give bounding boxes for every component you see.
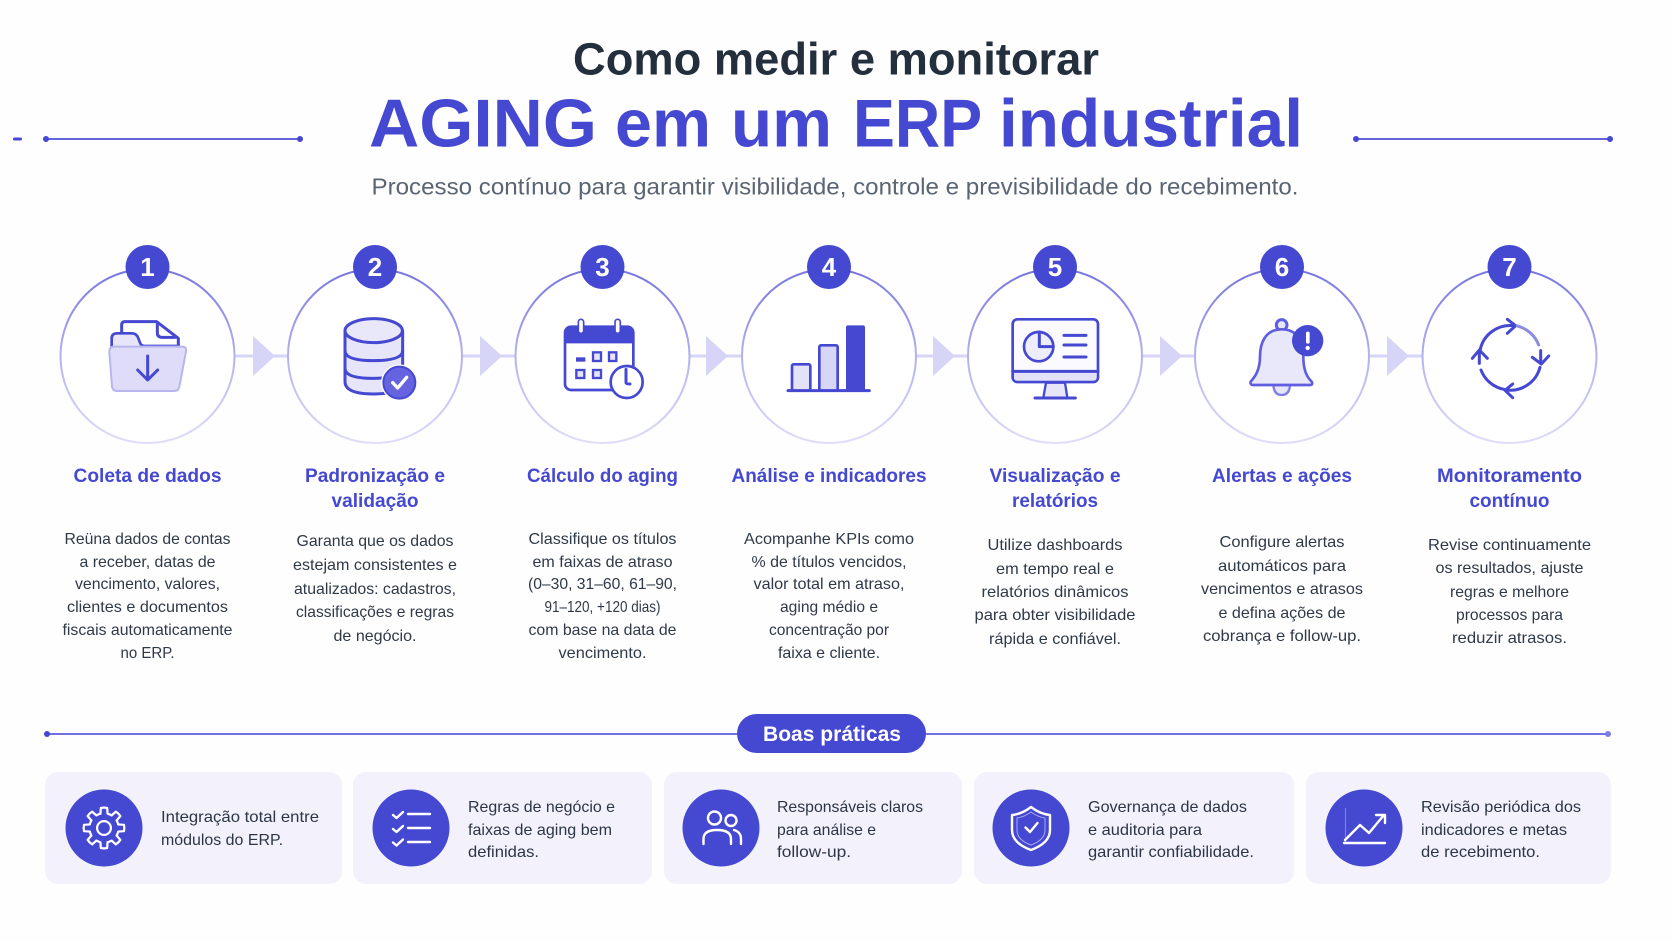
step 6 text: Configure alertas bbox=[1220, 534, 1344, 551]
step 2 heading bbox=[305, 465, 445, 512]
step 4 text: % de títulos vencidos, bbox=[752, 554, 906, 571]
step 5 text: para obter visibilidade bbox=[974, 607, 1136, 624]
title: AGING bbox=[369, 86, 597, 162]
step 3 text: 91–120, +120 dias) bbox=[544, 599, 660, 616]
icon: bar chart bbox=[788, 325, 869, 391]
step 3 text: em faixas de atraso bbox=[532, 554, 673, 571]
ring 6 bbox=[1195, 269, 1369, 443]
arrow 2 to 3 bbox=[462, 336, 515, 376]
step 2: padronização e validação bbox=[288, 245, 462, 645]
number badge 1 bbox=[126, 245, 170, 289]
step 4 text: aging médio e bbox=[780, 599, 878, 616]
step 3 text: vencimento. bbox=[558, 645, 646, 662]
section rule: boas práticas bbox=[44, 731, 1611, 737]
number badge 6 bbox=[1260, 245, 1304, 289]
card text: e auditoria para bbox=[1088, 822, 1202, 839]
number badge 1: 1 bbox=[140, 252, 155, 282]
card text: módulos do ERP. bbox=[161, 832, 283, 849]
title bbox=[369, 34, 1303, 162]
step 3 heading: Cálculo do aging bbox=[527, 465, 678, 487]
number badge 5: 5 bbox=[1048, 252, 1062, 282]
step 4 text: concentração por bbox=[769, 622, 890, 639]
step 7 text: processos para bbox=[1456, 607, 1563, 624]
card text: de recebimento. bbox=[1421, 844, 1540, 861]
step 1 heading: Coleta de dados bbox=[74, 465, 222, 487]
icon: shield bbox=[992, 790, 1070, 866]
icon: calendar with clock bbox=[565, 319, 643, 398]
step 7 text: regras e melhore bbox=[1450, 584, 1569, 601]
step 4 text: Acompanhe KPIs como bbox=[744, 531, 914, 548]
card text bbox=[468, 799, 615, 861]
title: industrial bbox=[999, 86, 1303, 162]
card text: para análise e bbox=[777, 822, 876, 839]
step 4 text: valor total em atraso, bbox=[754, 576, 904, 593]
card text bbox=[1421, 799, 1581, 861]
title: ERP bbox=[853, 86, 981, 162]
card: governança bbox=[974, 772, 1294, 884]
arrow 5 to 6 bbox=[1143, 336, 1195, 376]
number badge 4 bbox=[807, 245, 851, 289]
step 5 text: relatórios dinâmicos bbox=[982, 584, 1128, 601]
step 2 text: classificações e regras bbox=[296, 604, 454, 621]
card: revisão bbox=[1306, 772, 1611, 884]
ring 7 bbox=[1422, 269, 1596, 443]
ring 5 bbox=[968, 269, 1142, 443]
card text: Regras de negócio e bbox=[468, 799, 615, 816]
step 1 text: no ERP. bbox=[120, 645, 174, 662]
number badge 4: 4 bbox=[822, 252, 837, 282]
step 7 text: Revise continuamente bbox=[1428, 537, 1591, 554]
step 2 text: Garanta que os dados bbox=[296, 533, 454, 550]
card text: Integração total entre bbox=[161, 809, 319, 826]
step 4 text: faixa e cliente. bbox=[778, 645, 880, 662]
icon: checklist bbox=[372, 790, 450, 866]
icon: gear bbox=[66, 790, 142, 866]
step 3 text: (0–30, 31–60, 61–90, bbox=[528, 576, 677, 593]
step 2 text: de negócio. bbox=[334, 628, 416, 645]
number badge 3 bbox=[580, 245, 624, 289]
step 6 text: e defina ações de bbox=[1218, 605, 1346, 622]
step 1 text: a receber, datas de bbox=[80, 554, 216, 571]
step 2 text bbox=[293, 533, 457, 645]
number badge 2 bbox=[353, 245, 397, 289]
step 1 text: vencimento, valores, bbox=[75, 576, 220, 593]
icon: people bbox=[682, 790, 760, 866]
title: um bbox=[731, 86, 832, 162]
card text: garantir confiabilidade. bbox=[1088, 844, 1254, 861]
step 7 text: reduzir atrasos. bbox=[1452, 630, 1567, 647]
subtitle: Processo contínuo para garantir visibilidade, controle e previsibilidade do recebimento. bbox=[372, 174, 1298, 200]
card text bbox=[777, 799, 923, 861]
step 3 text bbox=[528, 531, 677, 662]
step 7 heading bbox=[1437, 465, 1582, 512]
arrow 6 to 7 bbox=[1369, 336, 1423, 376]
card text: faixas de aging bem bbox=[468, 822, 612, 839]
card: integração bbox=[45, 772, 342, 884]
ring 1 bbox=[60, 269, 234, 443]
step 5 text: em tempo real e bbox=[996, 561, 1114, 578]
step 2 heading: validação bbox=[332, 490, 419, 512]
step 1 text: fiscais automaticamente bbox=[62, 622, 233, 639]
step 5 text: rápida e confiável. bbox=[989, 631, 1121, 648]
card text bbox=[1088, 799, 1254, 861]
step 6 text: vencimentos e atrasos bbox=[1201, 581, 1363, 598]
number badge 7: 7 bbox=[1502, 252, 1517, 282]
step 1 text: Reüna dados de contas bbox=[64, 531, 230, 548]
step 5: visualização e relatórios bbox=[968, 245, 1142, 648]
step 1 text bbox=[62, 531, 233, 662]
step 3 text: com base na data de bbox=[528, 622, 677, 639]
step 7 text: os resultados, ajuste bbox=[1436, 560, 1584, 577]
icon: folder with download arrow bbox=[109, 322, 186, 391]
step 1: coleta de dados bbox=[60, 245, 234, 662]
title: em bbox=[615, 86, 711, 162]
step 3: cálculo do aging bbox=[516, 245, 690, 662]
step 6: alertas e ações bbox=[1195, 245, 1369, 645]
heading pill: boas práticas bbox=[737, 714, 926, 753]
ring 2 bbox=[288, 269, 462, 443]
arrow 3 to 4 bbox=[689, 336, 742, 376]
number badge 7 bbox=[1488, 245, 1532, 289]
step 4 heading: Análise e indicadores bbox=[732, 465, 927, 487]
number badge 6: 6 bbox=[1275, 252, 1289, 282]
icon: database with check bbox=[345, 319, 418, 401]
step 3 text: Classifique os títulos bbox=[528, 531, 676, 548]
step 7: monitoramento contínuo bbox=[1422, 245, 1596, 647]
arrow 1 to 2 bbox=[235, 336, 288, 376]
card text: Revisão periódica dos bbox=[1421, 799, 1581, 816]
card text: definidas. bbox=[468, 844, 539, 861]
icon: growth chart bbox=[1326, 790, 1402, 866]
header rule left bbox=[13, 136, 303, 142]
title: Como medir e monitorar bbox=[573, 34, 1099, 84]
step 6 text: cobrança e follow-up. bbox=[1203, 628, 1361, 645]
icon: bell with alert bbox=[1251, 320, 1323, 395]
icon: dashboard monitor bbox=[1013, 319, 1098, 398]
step 4: análise e indicadores bbox=[732, 245, 927, 662]
number badge 2: 2 bbox=[368, 252, 382, 282]
ring 4 bbox=[742, 269, 916, 443]
number badge 3: 3 bbox=[595, 252, 610, 282]
step 5 heading: relatórios bbox=[1012, 490, 1098, 512]
icon: cycle arrows bbox=[1472, 319, 1549, 398]
step 7 text bbox=[1428, 537, 1591, 647]
step 2 text: atualizados: cadastros, bbox=[294, 581, 456, 598]
card: responsáveis bbox=[664, 772, 962, 884]
step 5 text: Utilize dashboards bbox=[988, 537, 1122, 554]
card text: Responsáveis claros bbox=[777, 799, 923, 816]
step 7 heading: Monitoramento bbox=[1437, 465, 1582, 487]
step 4 text bbox=[744, 531, 914, 662]
step 2 heading: Padronização e bbox=[305, 465, 445, 487]
step 5 heading bbox=[990, 465, 1121, 512]
heading pill: boas práticas: Boas práticas bbox=[763, 723, 901, 746]
number badge 5 bbox=[1033, 245, 1077, 289]
card text: follow-up. bbox=[777, 844, 851, 861]
step 5 text bbox=[974, 537, 1136, 648]
header rule right bbox=[1353, 136, 1613, 142]
step 6 text: automáticos para bbox=[1218, 558, 1346, 575]
card text: Governança de dados bbox=[1088, 799, 1247, 816]
step 7 heading: contínuo bbox=[1470, 490, 1550, 512]
card text bbox=[161, 809, 319, 849]
step 6 text bbox=[1201, 534, 1363, 645]
card: regras bbox=[353, 772, 652, 884]
step 5 heading: Visualização e bbox=[990, 465, 1121, 487]
card text: indicadores e metas bbox=[1421, 822, 1567, 839]
ring 3 bbox=[516, 269, 690, 443]
arrow 4 to 5 bbox=[916, 336, 968, 376]
step 2 text: estejam consistentes e bbox=[293, 557, 457, 574]
step 1 text: clientes e documentos bbox=[67, 599, 228, 616]
step 6 heading: Alertas e ações bbox=[1212, 465, 1352, 487]
